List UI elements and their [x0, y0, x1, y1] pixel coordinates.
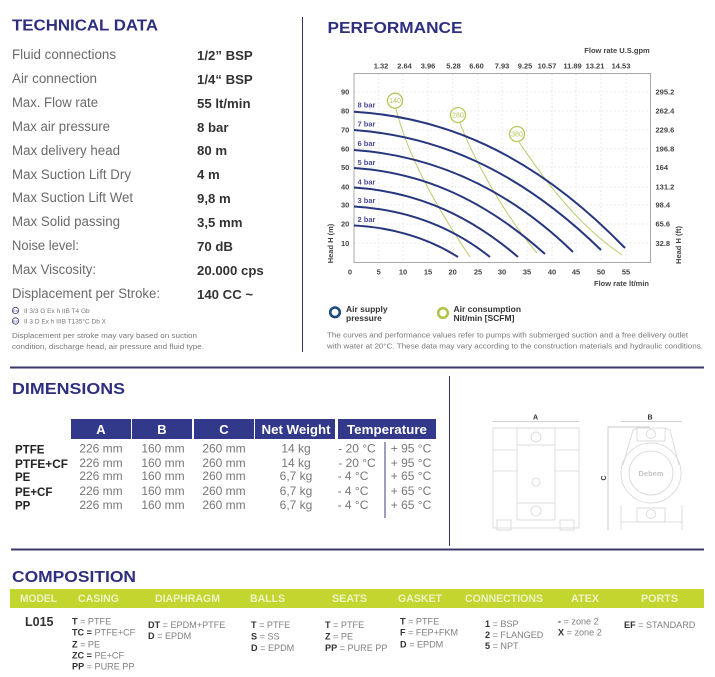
specification values: 4 m [197, 167, 220, 182]
balls options: S = SS [251, 632, 280, 642]
row values: - 4 °C [338, 484, 369, 498]
atex options: - = zone 2 [558, 616, 599, 626]
top axis: flow rate gpm: 10.57 [538, 62, 556, 70]
specification values: 3,5 mm [197, 215, 242, 230]
pump side view drawing [601, 414, 682, 530]
right axis: head in feet: 164 [656, 163, 669, 172]
specification values: 70 dB [197, 239, 233, 254]
bottom axis: flow rate lt/min: 10 [399, 268, 407, 276]
left axis: head in metres [326, 88, 349, 263]
casing options [72, 616, 136, 672]
row labels [15, 444, 68, 512]
pressure labels: 6 bar [358, 139, 376, 148]
seats options [325, 620, 387, 653]
bottom axis: flow rate lt/min: 0 [348, 268, 352, 276]
row values: 226 mm [79, 484, 123, 498]
row labels: PE+CF [15, 487, 52, 499]
performance chart [326, 46, 683, 288]
table header: Net Weight [262, 422, 331, 437]
right axis: head in feet: 262.4 [656, 106, 675, 116]
bottom axis: flow rate lt/min [348, 268, 649, 288]
row labels: PE [15, 472, 31, 484]
pump front view drawing: A [533, 414, 538, 422]
panel: technical data [12, 18, 264, 351]
row values: 6,7 kg [280, 469, 312, 483]
displacement note [12, 331, 204, 351]
casing options: Z = PE [72, 640, 100, 650]
legend: air supply pressure [330, 304, 388, 323]
balls options: T = PTFE [251, 620, 290, 630]
specification labels: Max air pressure [12, 119, 110, 134]
table header: C [219, 422, 229, 437]
row values: 160 mm [141, 442, 185, 456]
specification labels: Max delivery head [12, 143, 120, 158]
atex certification lines [12, 307, 107, 326]
row values: 160 mm [141, 456, 185, 470]
specification values [197, 48, 264, 302]
top axis: flow rate gpm: Flow rate U.S.gpm [584, 46, 650, 55]
row labels: PTFE+CF [15, 459, 68, 471]
air consumption curves: 280 [452, 112, 464, 120]
gasket options: F = FEP+FKM [400, 628, 458, 638]
row values: + 65 °C [391, 484, 432, 498]
specification labels: Max Solid passing [12, 214, 120, 229]
heading: performance: PERFORMANCE [328, 20, 462, 37]
composition header band: CONNECTIONS [465, 593, 543, 605]
pump side view drawing: B [647, 414, 653, 422]
seats options: Z = PE [325, 632, 353, 642]
connections options: 5 = NPT [485, 641, 519, 651]
left axis: head in metres: Head H (m) [326, 223, 335, 263]
air pressure curves [354, 112, 625, 257]
pressure labels [358, 100, 376, 224]
specification labels: Noise level: [12, 238, 79, 253]
legend: air supply pressure: pressure [346, 313, 382, 323]
composition header band: SEATS [332, 593, 367, 605]
bottom axis: flow rate lt/min: 45 [572, 268, 580, 276]
right axis: head in feet: 229.6 [656, 126, 674, 135]
casing options: TC = PTFE+CF [72, 628, 136, 638]
gasket options: T = PTFE [400, 616, 439, 626]
right axis: head in feet: 32.8 [656, 239, 670, 248]
left axis: head in metres: 90 [341, 88, 349, 96]
row values: 226 mm [79, 442, 123, 456]
pressure labels: 8 bar [358, 100, 376, 110]
specification values: 80 m [197, 143, 227, 158]
atex certification lines: Ex [13, 308, 18, 313]
pump side view drawing: Debem [638, 469, 664, 478]
atex certification lines: II 3 D Ex h IIIB T135°C Db X [24, 318, 107, 326]
connections options: 2 = FLANGED [485, 630, 544, 640]
right axis: head in feet: 196.8 [656, 144, 674, 154]
seats options: T = PTFE [325, 620, 364, 630]
air consumption curves: 140 [389, 98, 401, 105]
row values: 160 mm [141, 484, 185, 498]
row values: 14 kg [281, 442, 311, 456]
specification labels [12, 47, 160, 301]
specification values: 8 bar [197, 120, 229, 135]
row values: 260 mm [202, 442, 246, 456]
top axis: flow rate gpm: 3.96 [421, 62, 435, 70]
specification labels: Air connection [12, 71, 97, 86]
composition header band: CASING [78, 593, 119, 605]
top axis: flow rate gpm: 14.53 [612, 62, 630, 70]
seats options: PP = PURE PP [325, 643, 387, 653]
atex options: X = zone 2 [558, 628, 602, 638]
heading: composition: COMPOSITION [12, 569, 136, 586]
table header: A [96, 422, 106, 437]
left axis: head in metres: 30 [341, 201, 349, 210]
row values: 226 mm [79, 456, 123, 470]
legend: air consumption [438, 304, 521, 323]
specification values: 1/4“ BSP [197, 72, 253, 87]
legend: air consumption: Air consumption [454, 304, 521, 314]
balls options [251, 620, 294, 653]
top axis: flow rate gpm: 9.25 [518, 62, 532, 70]
pressure labels: 7 bar [358, 120, 376, 129]
bottom axis: flow rate lt/min: 20 [449, 268, 457, 276]
bottom axis: flow rate lt/min: Flow rate lt/min [594, 279, 649, 288]
row values: - 20 °C [338, 442, 376, 456]
composition header band: GASKET [398, 593, 442, 605]
specification labels: Max Suction Lift Dry [12, 167, 131, 182]
performance note: with water at 20°C. These data may vary according to the construction materials and hydraulic conditions. [326, 342, 703, 350]
row values: + 65 °C [391, 498, 432, 512]
row values: 260 mm [202, 498, 246, 512]
specification labels: Max Viscosity: [12, 262, 96, 277]
displacement note: condition, discharge head, air pressure and fluid type. [12, 342, 204, 351]
row labels: PP [15, 500, 31, 512]
right axis: head in feet: Head H (ft) [674, 226, 683, 264]
row values: - 20 °C [338, 456, 376, 470]
composition header band: DIAPHRAGM [155, 593, 220, 605]
row values: 160 mm [141, 498, 185, 512]
right axis: head in feet [656, 88, 683, 264]
pressure labels: 4 bar [358, 178, 376, 186]
composition header band: BALLS [250, 593, 285, 605]
specification values: 20.000 cps [197, 263, 264, 278]
left axis: head in metres: 40 [341, 182, 349, 192]
atex options [558, 616, 602, 638]
row values: 160 mm [141, 469, 185, 483]
ports options: EF = STANDARD [624, 620, 696, 630]
legend: air consumption: Nit/min [SCFM] [454, 313, 515, 323]
air consumption curves: 380 [511, 132, 523, 138]
right axis: head in feet: 65.6 [656, 220, 670, 228]
bottom axis: flow rate lt/min: 40 [548, 268, 556, 276]
specification values: 55 lt/min [197, 96, 250, 111]
panel: dimensions [12, 381, 682, 530]
row values: + 65 °C [391, 469, 432, 483]
left axis: head in metres: 50 [341, 163, 349, 172]
pressure labels: 5 bar [358, 158, 376, 167]
air consumption curves [388, 93, 622, 257]
dimensions table [15, 419, 436, 518]
casing options: ZC = PE+CF [72, 650, 125, 660]
table header: Temperature [347, 422, 427, 437]
specification labels: Displacement per Stroke: [12, 286, 160, 301]
row values: 226 mm [79, 469, 123, 483]
bottom axis: flow rate lt/min: 35 [523, 268, 531, 276]
top axis: flow rate gpm [374, 46, 650, 70]
pressure labels: 3 bar [358, 196, 376, 205]
left axis: head in metres: 60 [341, 144, 349, 154]
composition header band: PORTS [641, 593, 678, 605]
row values: 260 mm [202, 456, 246, 470]
row values: 14 kg [281, 456, 311, 470]
specification values: 1/2” BSP [197, 48, 253, 63]
panel: composition [10, 569, 704, 672]
row values: 260 mm [202, 469, 246, 483]
left axis: head in metres: 20 [341, 220, 349, 228]
pump side view drawing: C [601, 475, 608, 481]
casing options: PP = PURE PP [72, 662, 134, 672]
performance note: The curves and performance values refer to pumps with submerged suction and a free delivery outlet [327, 330, 689, 340]
left axis: head in metres: 10 [341, 239, 349, 248]
balls options: D = EPDM [251, 643, 294, 653]
row values: 6,7 kg [280, 484, 312, 498]
left axis: head in metres: 70 [341, 126, 349, 135]
left axis: head in metres: 80 [341, 106, 349, 116]
right axis: head in feet: 295.2 [656, 88, 674, 96]
row values: - 4 °C [338, 498, 369, 512]
top axis: flow rate gpm: 2.64 [397, 62, 413, 70]
top axis: flow rate gpm: 5.28 [446, 62, 461, 70]
bottom axis: flow rate lt/min: 50 [597, 268, 605, 276]
table header: B [157, 422, 167, 437]
casing options: T = PTFE [72, 616, 111, 626]
atex certification lines: II 3/3 G Ex h IIB T4 Gb [24, 308, 90, 315]
row values: + 95 °C [391, 456, 432, 470]
row labels: PTFE [15, 444, 45, 456]
bottom axis: flow rate lt/min: 5 [377, 268, 381, 276]
diaphragm options [148, 620, 225, 641]
specification labels: Max Suction Lift Wet [12, 190, 133, 205]
diaphragm options: DT = EPDM+PTFE [148, 620, 225, 630]
row values: - 4 °C [338, 469, 369, 483]
composition header band: MODEL [20, 593, 57, 605]
row values: 6,7 kg [280, 498, 312, 512]
gasket options: D = EPDM [400, 640, 443, 650]
bottom axis: flow rate lt/min: 25 [474, 268, 482, 276]
heading: dimensions: DIMENSIONS [12, 381, 125, 398]
row values [79, 442, 432, 512]
connections options: 1 = BSP [485, 619, 519, 629]
row values: + 95 °C [391, 442, 432, 456]
model code: L015 [25, 615, 54, 629]
bottom axis: flow rate lt/min: 15 [424, 268, 432, 276]
specification values: 140 CC ~ [197, 287, 253, 302]
row values: 260 mm [202, 484, 246, 498]
specification labels: Fluid connections [12, 47, 116, 62]
panel: performance [326, 20, 703, 350]
top axis: flow rate gpm: 1.32 [374, 62, 388, 70]
bottom axis: flow rate lt/min: 30 [498, 268, 506, 276]
top axis: flow rate gpm: 13.21 [586, 62, 604, 70]
table header [71, 419, 436, 439]
bottom axis: flow rate lt/min: 55 [622, 268, 630, 276]
gasket options [400, 616, 458, 650]
atex certification lines: Ex [13, 318, 18, 324]
composition header band: ATEX [571, 593, 600, 605]
right axis: head in feet: 131.2 [656, 182, 674, 192]
top axis: flow rate gpm: 6.60 [469, 62, 484, 70]
top axis: flow rate gpm: 7.93 [495, 62, 509, 70]
row values: 226 mm [79, 498, 123, 512]
connections options [485, 619, 544, 651]
right axis: head in feet: 98.4 [656, 201, 671, 210]
heading: technical data: TECHNICAL DATA [12, 18, 158, 34]
composition header band [10, 589, 704, 608]
legend: air supply pressure: Air supply [346, 304, 388, 314]
top axis: flow rate gpm: 11.89 [563, 62, 582, 70]
performance note [326, 330, 703, 350]
specification labels: Max. Flow rate [12, 95, 98, 110]
diaphragm options: D = EPDM [148, 631, 191, 641]
specification values: 9,8 m [197, 191, 231, 206]
displacement note: Displacement per stroke may vary based on suction [12, 331, 197, 340]
pump front view drawing [492, 414, 579, 530]
pressure labels: 2 bar [358, 215, 376, 224]
